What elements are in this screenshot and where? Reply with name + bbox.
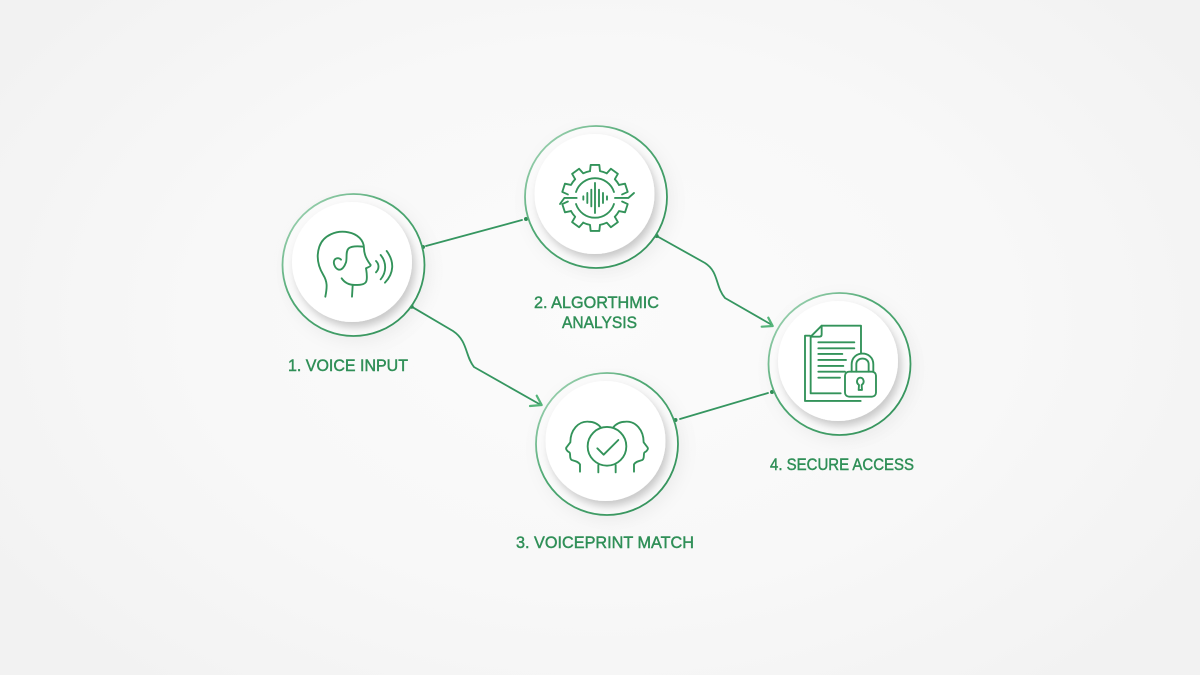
inner disc bbox=[546, 381, 666, 501]
outer ring bbox=[282, 194, 424, 336]
label: step 1: 1. VOICE INPUT bbox=[288, 356, 408, 375]
label: step 2 bbox=[534, 293, 659, 332]
connector: voiceprint match to secure access bbox=[674, 390, 774, 422]
inner disc bbox=[778, 301, 898, 421]
label: step 2: 2. ALGORTHMIC bbox=[534, 293, 659, 312]
step 4 node: secure access bbox=[768, 293, 910, 435]
outer ring bbox=[536, 373, 678, 515]
step 2 node: algorithmic analysis bbox=[525, 126, 667, 268]
icon: gear with waveform bbox=[560, 164, 634, 232]
label: step 3: 3. VOICEPRINT MATCH bbox=[516, 533, 694, 552]
step 1 node: voice input bbox=[282, 194, 424, 336]
outer ring bbox=[525, 126, 667, 268]
inner disc bbox=[292, 202, 412, 322]
outer ring bbox=[768, 293, 910, 435]
step 3 node: voiceprint match bbox=[536, 373, 678, 515]
label: step 2: ANALYSIS bbox=[562, 313, 637, 332]
icon: document with padlock bbox=[805, 326, 876, 401]
icon: speaking head bbox=[318, 232, 392, 297]
inner disc bbox=[534, 134, 654, 254]
label: step 4: 4. SECURE ACCESS bbox=[770, 455, 914, 474]
icon: two heads with check mark bbox=[566, 422, 648, 472]
arrow: voice input to voiceprint match bbox=[410, 305, 542, 406]
arrow: algorithmic analysis to secure access bbox=[655, 234, 773, 327]
connector: voice input to algorithmic analysis bbox=[421, 217, 528, 249]
